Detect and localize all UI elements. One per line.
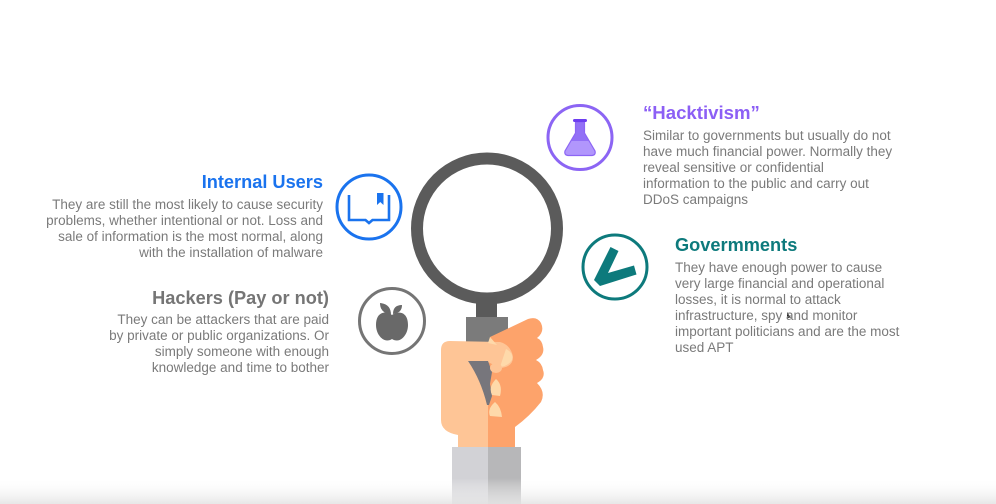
cursor <box>787 312 791 319</box>
text: Internal Users description: with the installation of malware <box>139 245 323 260</box>
sleeve <box>452 447 521 504</box>
text: Hacktivism description: have much financial power. Normally they <box>643 144 892 159</box>
text: Hacktivism description: reveal sensitive or confidential <box>643 160 824 175</box>
text: Hackers description <box>109 312 329 375</box>
text: Governments description: infrastructure, spy and monitor <box>675 308 857 323</box>
text: Governments description: used APT <box>675 340 734 355</box>
text: Governments description <box>675 260 900 355</box>
icon: book <box>337 175 401 239</box>
text: Hackers description: by private or public organizations. Or <box>109 328 329 343</box>
heading: Hackers: Hackers (Pay or not) <box>152 288 329 308</box>
hand holding the magnifier <box>441 318 544 447</box>
text: Governments description: They have enough power to cause <box>675 260 882 275</box>
text: Hacktivism description: DDoS campaigns <box>643 192 748 207</box>
text: Internal Users description <box>46 197 323 260</box>
text: Internal Users description: They are still the most likely to cause security <box>52 197 323 212</box>
text: Hacktivism description <box>643 128 892 207</box>
icon: check mark <box>583 235 647 299</box>
magnifying glass <box>417 158 557 347</box>
text: Governments description: important politicians and are the most <box>675 324 899 339</box>
text: Hackers description: simply someone with enough <box>155 344 329 359</box>
text: Internal Users description: problems, whether intentional or not. Loss and <box>46 213 323 228</box>
bottom fade <box>0 478 996 504</box>
text: Internal Users description: sale of information is the most normal, along <box>58 229 323 244</box>
text: Hacktivism description: Similar to governments but usually do not <box>643 128 891 143</box>
text: Hacktivism description: information to the public and carry out <box>643 176 869 191</box>
heading: Internal Users: Internal Users <box>202 172 323 192</box>
text: Governments description: very large financial and operational <box>675 276 884 291</box>
heading: Governments: Govermments <box>675 235 797 255</box>
text: Hackers description: knowledge and time to bother <box>152 360 329 375</box>
text: Hackers description: They can be attackers that are paid <box>117 312 329 327</box>
icon: flask <box>548 106 612 170</box>
icon: apple <box>360 288 424 354</box>
text: Governments description: losses, it is normal to attack <box>675 292 841 307</box>
heading: Hacktivism: “Hacktivism” <box>643 102 760 123</box>
